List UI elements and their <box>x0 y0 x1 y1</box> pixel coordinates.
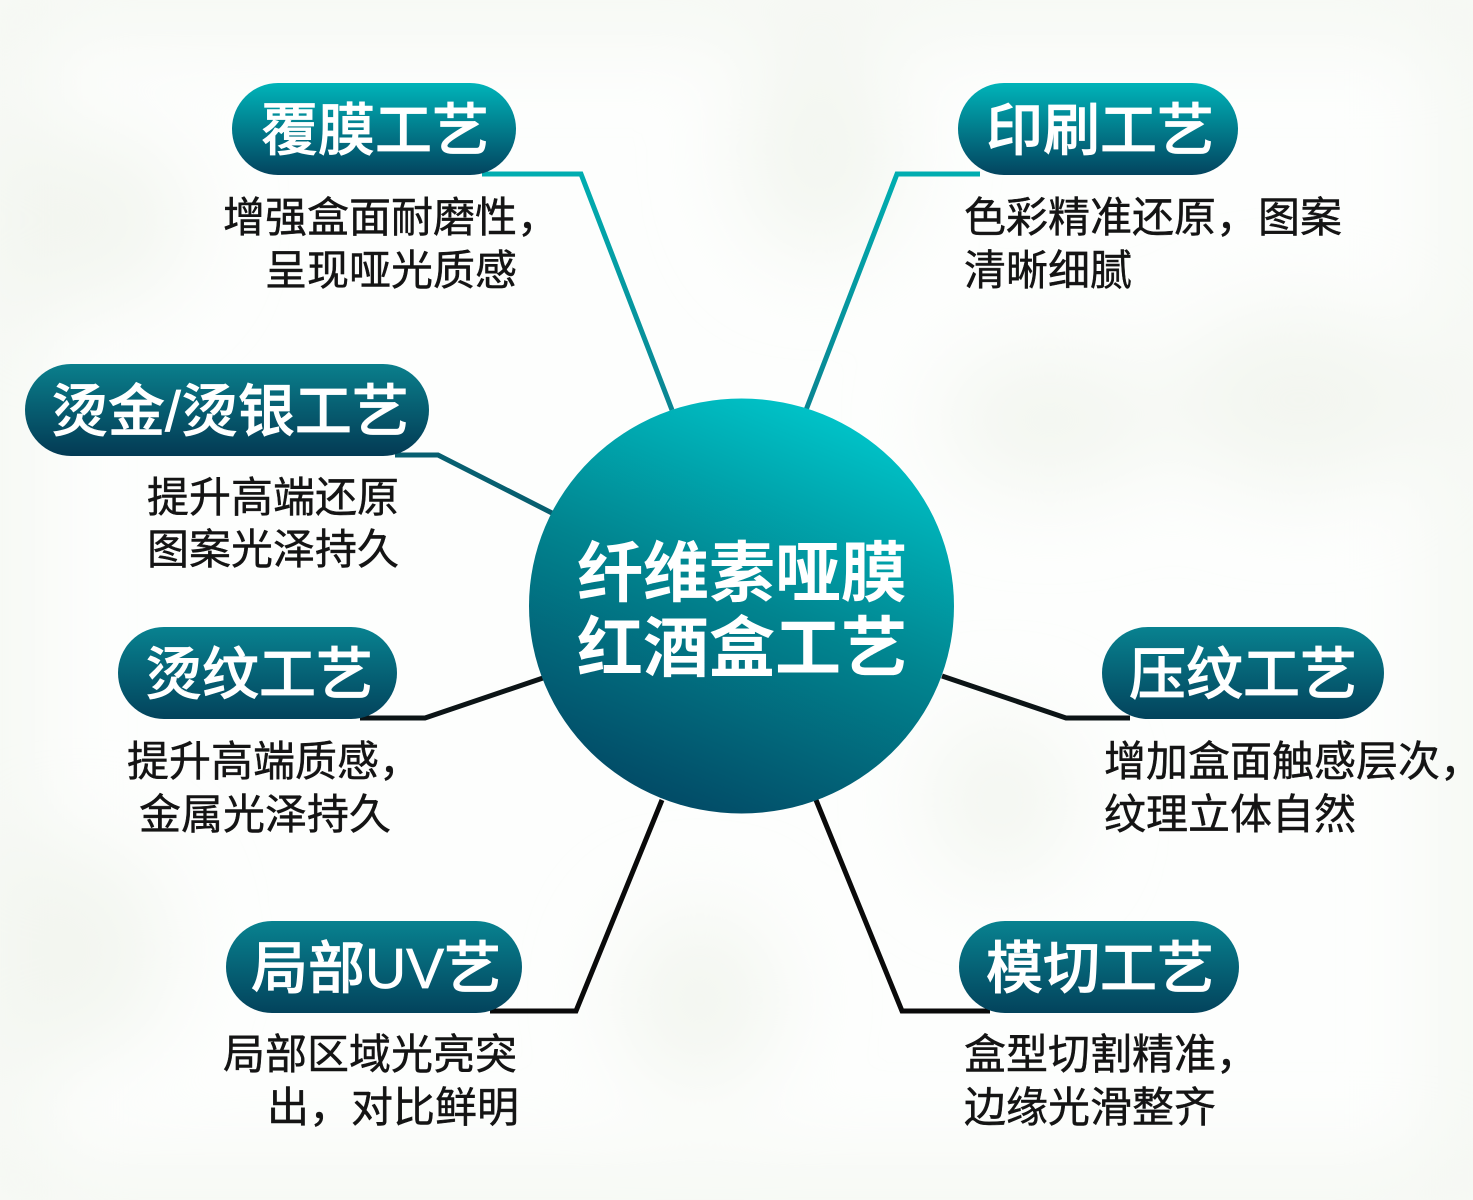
connector: 局部UV工艺 <box>490 800 662 1011</box>
panel: 局部UV工艺 <box>223 921 522 1131</box>
connector: 烫金/烫银工艺 <box>395 455 552 513</box>
panel: 印刷工艺: 清晰细腻 <box>964 247 1132 294</box>
panel: 印刷工艺 <box>958 83 1342 294</box>
panel: 覆膜工艺: 呈现哑光质感 <box>265 247 517 294</box>
panel: 烫纹工艺 <box>118 627 421 838</box>
panel: 烫纹工艺: 提升高端质感， <box>127 738 421 785</box>
panel: 模切工艺: 边缘光滑整齐 <box>964 1084 1216 1131</box>
panel: 覆膜工艺: 增强盒面耐磨性， <box>223 194 559 241</box>
panel: 局部UV工艺: 出，对比鲜明 <box>267 1084 519 1131</box>
panel: 烫金/烫银工艺: 烫金/烫银工艺 <box>51 380 409 444</box>
center circle with title: 纤维素哑膜 <box>577 536 907 610</box>
connector: 印刷工艺 <box>806 174 980 410</box>
panel: 覆膜工艺 <box>223 83 559 294</box>
panel: 压纹工艺: 纹理立体自然 <box>1104 791 1356 838</box>
panel: 压纹工艺 <box>1102 627 1473 838</box>
panel: 模切工艺: 盒型切割精准， <box>964 1031 1258 1078</box>
panel: 印刷工艺: 色彩精准还原，图案 <box>964 194 1342 241</box>
panel: 压纹工艺: 压纹工艺 <box>1129 643 1357 707</box>
panel: 局部UV工艺: 局部UV艺 <box>251 937 501 1001</box>
panel: 烫金/烫银工艺: 图案光泽持久 <box>147 526 399 573</box>
panel: 模切工艺 <box>959 921 1258 1131</box>
panel: 模切工艺: 模切工艺 <box>986 937 1214 1001</box>
connector: 压纹工艺 <box>942 676 1130 718</box>
connector: 模切工艺 <box>816 800 990 1011</box>
connector: 烫纹工艺 <box>360 678 543 718</box>
panel: 烫金/烫银工艺: 提升高端还原 <box>147 474 399 521</box>
panel: 压纹工艺: 增加盒面触感层次， <box>1104 738 1473 785</box>
connector: 覆膜工艺 <box>482 174 672 410</box>
panel: 印刷工艺: 印刷工艺 <box>986 99 1214 163</box>
center circle with title: 红酒盒工艺 <box>577 611 907 685</box>
center circle with title <box>529 398 954 814</box>
panel: 局部UV工艺: 局部区域光亮突 <box>223 1031 517 1078</box>
panel: 覆膜工艺: 覆膜工艺 <box>261 99 489 163</box>
panel: 烫纹工艺: 烫纹工艺 <box>145 643 373 707</box>
panel: 烫纹工艺: 金属光泽持久 <box>139 791 391 838</box>
panel: 烫金/烫银工艺 <box>25 364 429 573</box>
